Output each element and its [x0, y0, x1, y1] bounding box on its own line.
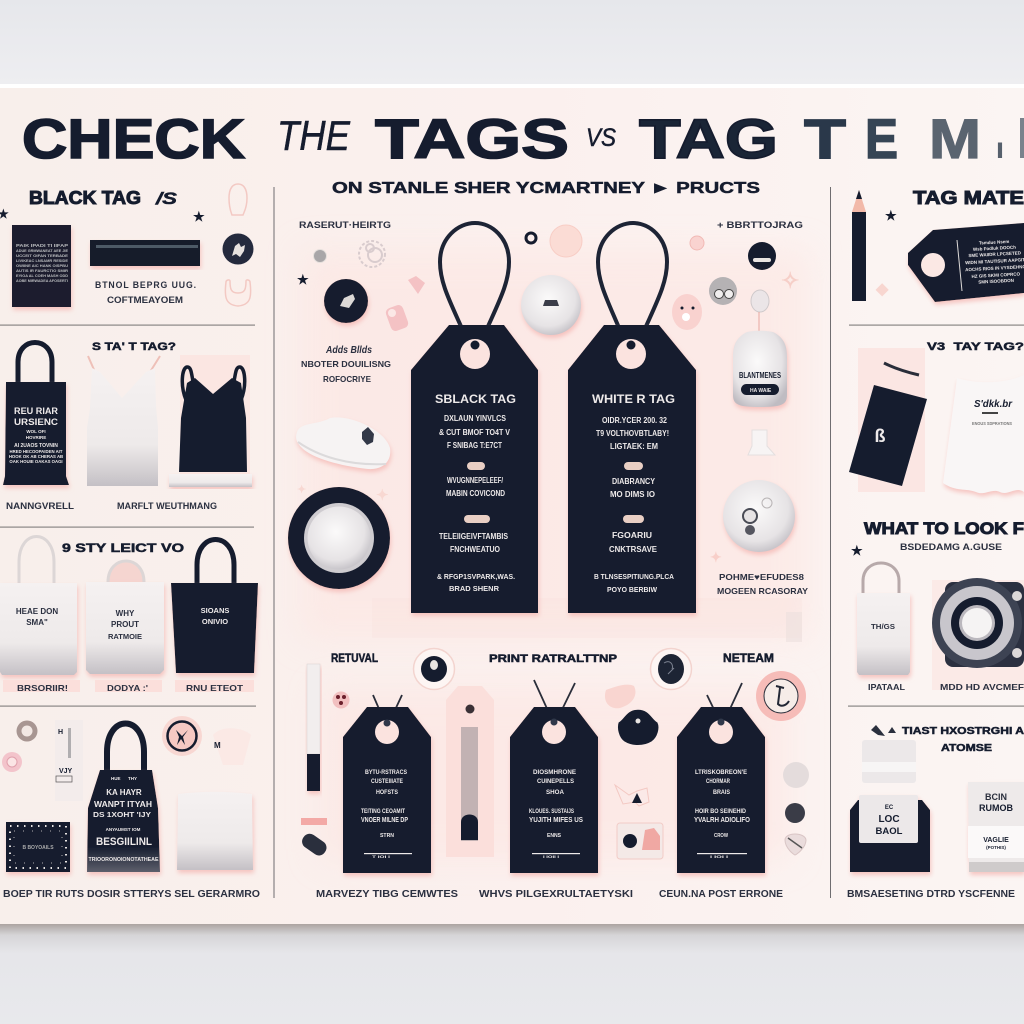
panel: tag material (right top) — [852, 188, 1024, 302]
bottle tag: HA WAIE — [750, 388, 772, 394]
panel: start tag (left second row) — [3, 341, 252, 512]
captions: NANNGVRELL — [6, 501, 74, 512]
black label card: LIVIKEAC LNSAMR RESIDE — [16, 258, 68, 263]
white cap — [748, 430, 775, 455]
backdrop floor — [0, 923, 1024, 1024]
left text block — [301, 345, 391, 384]
small tag B — [510, 680, 598, 873]
tag text: B TLNSESPITIUNG.PLCA — [594, 572, 675, 581]
tag text: DXLAUN YINVLCS — [444, 414, 507, 423]
pink disc — [550, 225, 582, 257]
title — [22, 107, 1024, 170]
black apron bag: WANPT ITYAH — [94, 799, 152, 809]
tag cord — [598, 223, 667, 340]
horizontal tag: WIDN MI TAUTISUR AAPGIT — [965, 257, 1024, 265]
white bag 2: WHY — [116, 609, 135, 618]
panel: bottom center — [299, 648, 809, 900]
bottom caption: BOEP TIR RUTS DOSIR STTERYS SEL GERARMRO — [3, 889, 260, 900]
star icons — [0, 207, 205, 224]
white bag: TH/GS — [871, 622, 895, 631]
tag text: CNKTRSAVE — [609, 545, 658, 554]
black label disc — [748, 242, 776, 270]
black bar — [90, 240, 200, 266]
small tag C: YVALRH ADIOLIFO — [694, 817, 750, 824]
horizontal tag: Tsmdue Nsem — [979, 239, 1009, 246]
tag text: MABIN COVICOND — [446, 489, 505, 498]
dotted black card — [6, 822, 70, 872]
black pill — [299, 831, 329, 858]
pink pedestal under main tags — [372, 598, 802, 638]
small tag A: CUSTEIIIATE — [371, 779, 403, 785]
subtitle: ON STANLE SHER YCMARTNEY ► PRUCTS — [332, 180, 760, 197]
tag text: & CUT BMOF TO4T V — [439, 428, 511, 437]
right text block — [717, 572, 808, 596]
narrow label strip — [55, 720, 83, 801]
t-shirt text — [972, 399, 1013, 426]
bottom caption: BMSAESETING DTRD YSCFENNE — [847, 889, 1015, 900]
small black ring — [526, 233, 536, 243]
star: ★ — [297, 272, 309, 287]
jar text: LOC — [878, 814, 900, 825]
black label card: EYIOA AL COEH MASH ODD — [16, 273, 68, 278]
black bag with text: HRED HECOOPAIDEN AIT — [10, 449, 63, 454]
tag text — [435, 392, 516, 593]
black bag with text: REU RIAR — [14, 406, 58, 417]
black bag with text: AI 2UAOS TOVNIN — [14, 443, 58, 449]
white bag — [857, 563, 910, 675]
heading: TAG MATE — [913, 188, 1024, 208]
black bag with text: HOVRIRE — [26, 435, 46, 440]
small tag C — [677, 683, 765, 873]
center pink wash — [300, 250, 810, 640]
black apron bag: HUE THY — [111, 776, 137, 781]
t-shirt text: ENOUS SDPRATIONS — [972, 421, 1012, 426]
small tag C: I IOI I — [710, 854, 728, 859]
small tag A: TEITING CEOAMIT — [361, 809, 405, 815]
pink sparkle: ◆ — [875, 281, 889, 298]
star icons: ★ — [193, 209, 205, 224]
headings: RETUVAL — [331, 651, 378, 665]
black apron bag: ANYAUMST IOM — [106, 827, 141, 832]
horizontal tag: SMN ISOOBDON — [978, 278, 1014, 285]
heading: black tag vs: BLACK TAG — [29, 188, 141, 208]
column dividers — [0, 187, 1024, 898]
horizontal tag — [908, 223, 1024, 302]
small tag B: I IOII I — [543, 854, 559, 859]
lower center pink wash — [320, 690, 790, 860]
black apron bag: BESGIILINL — [96, 836, 152, 848]
white bag 1: SMA" — [26, 618, 48, 627]
black jar with label — [850, 795, 930, 872]
panel: bottom right — [847, 725, 1024, 900]
badge 1 — [414, 648, 454, 690]
black apron bag: TRIOORONOIONOTATHEAE — [88, 857, 159, 863]
small tag B: ENNS — [547, 833, 562, 839]
panel: black tag (left top) — [0, 184, 254, 307]
t-shirt text: S'dkk.br — [974, 399, 1013, 410]
right text block: POHME♥EFUDES8 — [719, 572, 804, 582]
gray block — [786, 612, 802, 642]
tag text: & RFGP1SVPARK,WAS. — [437, 572, 515, 581]
tag text — [592, 392, 675, 594]
bottle tag: BLANTMENES — [739, 371, 781, 380]
horizontal tag: Wsb Fodluk DOOCh — [973, 245, 1016, 252]
captions: BRSORIIR! — [17, 683, 68, 693]
left text block: NBOTER DOUILISNG — [301, 359, 391, 369]
small tag B: KLOUES. SUSTAIJS — [529, 809, 574, 815]
captions — [17, 683, 244, 693]
black bag with text: URSIENC — [14, 417, 58, 428]
horizontal tag: SME WAIIDR LPCSETED — [968, 250, 1022, 258]
main tag: black tag — [411, 223, 538, 613]
jar text: BAOL — [876, 826, 903, 837]
small round icons — [2, 720, 38, 772]
black apron bag: KA HAYR — [106, 788, 142, 797]
captions — [868, 682, 1024, 692]
white product — [968, 782, 1024, 872]
icons and heading: TIAST HXOSTRGHI A — [902, 726, 1024, 737]
pink backdrop — [858, 348, 925, 492]
black bag: SIOANS — [201, 606, 229, 615]
tag text: F SNIBAG T:E7CT — [447, 441, 502, 450]
badge 2 — [650, 648, 692, 690]
round badge — [162, 716, 202, 756]
large black ring button — [288, 487, 390, 589]
black label card: UCCEIT OIFAN TERBADE — [16, 253, 68, 258]
tag hole — [616, 339, 646, 369]
black camisole — [179, 367, 247, 472]
caption: COFTMEAYOEM — [107, 295, 183, 306]
jar text: EC — [885, 805, 894, 811]
tag hole — [460, 339, 490, 369]
panel: what to look for — [851, 542, 1024, 692]
dice icon — [332, 692, 350, 708]
black bag: ONIVIO — [202, 617, 228, 626]
black label card: AOBE MIRWADEA AFOSERTI — [16, 278, 68, 283]
right text block: MOGEEN RCASORAY — [717, 586, 808, 596]
pink face charm — [672, 294, 702, 330]
lace ornament — [359, 241, 385, 267]
tag text: LIGTAEK: EM — [610, 442, 658, 451]
panel: fourth row — [2, 716, 260, 900]
tag body — [411, 325, 538, 613]
product text: VAGLIE — [983, 837, 1009, 844]
tag text: T9 VOLTHOVBTLABY! — [596, 429, 669, 438]
large gray button — [723, 480, 795, 552]
tag text: DIABRANCY — [612, 477, 656, 486]
product text: (POTHIS) — [986, 845, 1006, 850]
caption: BTNOL BEPRG UUG. — [95, 280, 197, 291]
subheading: BSDEDAMG A.GUSE — [900, 542, 1002, 552]
icons and heading: ATOMSE — [941, 743, 992, 754]
label right: + BBRTTOJRAG — [717, 220, 803, 230]
pink stars: ✦ — [376, 487, 389, 504]
horizontal tag: HZ GIS SKMI COPRCO — [971, 271, 1021, 279]
title: CHECK — [22, 107, 245, 170]
pink bar — [301, 818, 327, 825]
product text: RUMOB — [979, 803, 1013, 813]
black apron bag: DS 1XOHT 'IJY — [93, 812, 151, 819]
small tag A: STRN — [380, 833, 394, 839]
small tag C: LTRISKOBREON'E — [695, 770, 747, 776]
left text block: Adds Bllds — [325, 345, 372, 356]
headings: PRINT RATRALTTNP — [489, 653, 617, 665]
small tag C: CHORMAR — [706, 779, 731, 785]
star: ★ — [885, 208, 897, 223]
large white button — [521, 275, 581, 335]
tag text: FNCHWEATUO — [450, 545, 500, 554]
black cap charm — [617, 709, 659, 746]
panel: center top decorations left — [288, 220, 425, 589]
white bag 1 — [0, 536, 77, 675]
captions: MDD HD AVCMEF — [940, 682, 1024, 692]
panel: third row bags — [0, 536, 258, 693]
label left: RASERUT·HEIRTG — [299, 220, 391, 230]
narrow label strip: VJY — [59, 768, 73, 775]
round logo button — [222, 234, 254, 264]
main tag: white tag — [568, 223, 696, 613]
headings — [331, 651, 774, 665]
white sneaker — [296, 417, 390, 469]
black label card: PAIK IPADI TI IIFAP — [16, 243, 68, 248]
small tag B: DIOSMHRONE — [533, 770, 576, 776]
tag text: WVUGNNEPELEEF/ — [447, 476, 504, 485]
pink caption strips — [3, 680, 254, 692]
white strip — [169, 474, 252, 487]
black bag with text: WOL OFI — [26, 429, 46, 434]
tag text: WHITE R TAG — [592, 392, 675, 406]
white bag 2 — [86, 561, 164, 674]
tag text: FGOARIU — [612, 531, 652, 540]
pink loops — [225, 184, 251, 306]
captions: DODYA :' — [107, 683, 148, 693]
title: M — [929, 107, 981, 170]
icons and heading — [871, 725, 1024, 754]
pencil — [852, 190, 866, 301]
black bag with text: OAK HOUIE OAKAS OAGI — [9, 459, 63, 464]
photo card — [617, 823, 663, 859]
black card — [849, 363, 927, 486]
captions: RNU ETEOT — [186, 683, 244, 693]
bottom captions: CEUN.NA POST ERRONE — [659, 889, 783, 900]
title: VS — [586, 124, 616, 152]
gray eyes button — [709, 277, 737, 305]
heading: S TA' T TAG? — [92, 341, 176, 353]
title: TAG — [639, 107, 778, 170]
tag text: SBLACK TAG — [435, 392, 516, 406]
small gray button — [314, 250, 326, 262]
tag text: MO DIMS IO — [610, 490, 655, 499]
tag text: POYO BERBIW — [607, 585, 658, 594]
tag text: BRAD SHENR — [449, 584, 500, 593]
side buttons — [783, 762, 809, 855]
black label card — [12, 225, 71, 307]
caption — [95, 280, 197, 306]
pink stars — [297, 484, 389, 504]
black apron bag — [87, 724, 160, 872]
black bag with text: HOOK OK AB CHERAS AB — [9, 454, 63, 459]
panel: vs tag (right second row) — [849, 341, 1024, 538]
product text — [979, 792, 1013, 850]
pink sparkle: ✧ — [781, 268, 799, 293]
bottom captions — [316, 889, 783, 900]
pink heart charm — [605, 685, 635, 708]
pink stars: ✦ — [297, 484, 306, 496]
white bag 2: PROUT — [111, 620, 139, 629]
heading suffix: /S — [155, 189, 178, 208]
black label card: AUTIS IR FAURCTIO SMIR — [16, 268, 68, 273]
small tag A: T IOI I — [372, 854, 390, 859]
small tag B: CUINEPELLS — [537, 779, 574, 785]
title: THE — [277, 112, 351, 159]
small tag A — [343, 695, 431, 873]
black card: ß — [874, 426, 886, 446]
pink sparkle: ✦ — [710, 549, 722, 565]
pink backdrop — [932, 580, 1024, 690]
small tag C: CROW — [714, 833, 728, 839]
black label card: ADUE GRMWANEAT AEE JIE — [16, 248, 68, 253]
small tag C: HOIR BO SEINEHID — [695, 809, 747, 815]
badge 3 pink — [756, 671, 806, 721]
pink letter charm: M — [214, 741, 221, 750]
small pink swirl — [690, 236, 704, 250]
dotted black card: B BOYOAILS — [22, 845, 54, 851]
pink bow — [615, 785, 649, 806]
tag body — [568, 325, 696, 613]
pink backdrop and black top — [180, 355, 250, 485]
backdrop wall — [0, 0, 1024, 86]
white bag 1: HEAE DON — [16, 607, 58, 616]
jar text — [876, 805, 903, 837]
white t-shirt — [943, 375, 1024, 493]
black label card: OWIINE AIC HANK OISPBU — [16, 263, 68, 268]
star: ★ — [851, 543, 863, 558]
tag text: TELEIIGEIVFTAMBIS — [439, 532, 509, 541]
heading: what to look for: WHAT TO LOOK F — [864, 519, 1024, 538]
title: E — [865, 107, 898, 170]
bottom captions: WHVS PILGEXRULTAETYSKI — [479, 889, 633, 900]
white top — [177, 792, 253, 870]
title: T — [804, 107, 846, 170]
white top — [87, 356, 160, 486]
title: TAGS — [375, 107, 569, 170]
headings: NETEAM — [723, 651, 774, 665]
bottom captions: MARVEZY TIBG CEMWTES — [316, 889, 458, 900]
small tag B: SHOA — [546, 790, 565, 796]
black bag — [171, 540, 258, 673]
product text: BCIN — [985, 792, 1007, 802]
tag text: OIDR.YCER 200. 32 — [602, 416, 667, 425]
small tag A: HOFSTS — [376, 790, 398, 796]
pink letter charm — [213, 728, 251, 765]
small tag C: BRAIS — [713, 790, 730, 796]
small tag A: BYTU-RSTRACS — [365, 770, 407, 776]
small tag A: VNOER MILNE DP — [361, 817, 408, 824]
bottle tag — [733, 290, 787, 407]
tag cord — [440, 223, 509, 340]
heading: V3 TAY TAG? — [927, 341, 1024, 353]
white stick — [307, 664, 320, 791]
pink charms — [384, 276, 425, 332]
black pin button — [324, 279, 368, 323]
white bag 2: RATMOIE — [108, 632, 142, 641]
captions: IPATAAL — [868, 682, 905, 692]
camera lens — [932, 578, 1024, 668]
translucent pink tag — [446, 686, 494, 857]
heading: 9 STY LEICT VO — [62, 541, 184, 555]
captions — [6, 501, 217, 512]
black bag with text — [3, 342, 69, 485]
panel: center top decorations right — [521, 220, 808, 642]
horizontal tag: AOCHS RIOS IN VYSDEHNC — [965, 264, 1024, 272]
narrow label strip: H — [58, 729, 63, 736]
jar cap — [862, 740, 916, 783]
title: I — [996, 138, 1004, 163]
left text block: ROFOCRIYE — [323, 374, 371, 384]
captions: MARFLT WEUTHMANG — [117, 501, 217, 512]
small tag B: YUJITH MIFES US — [529, 817, 583, 824]
